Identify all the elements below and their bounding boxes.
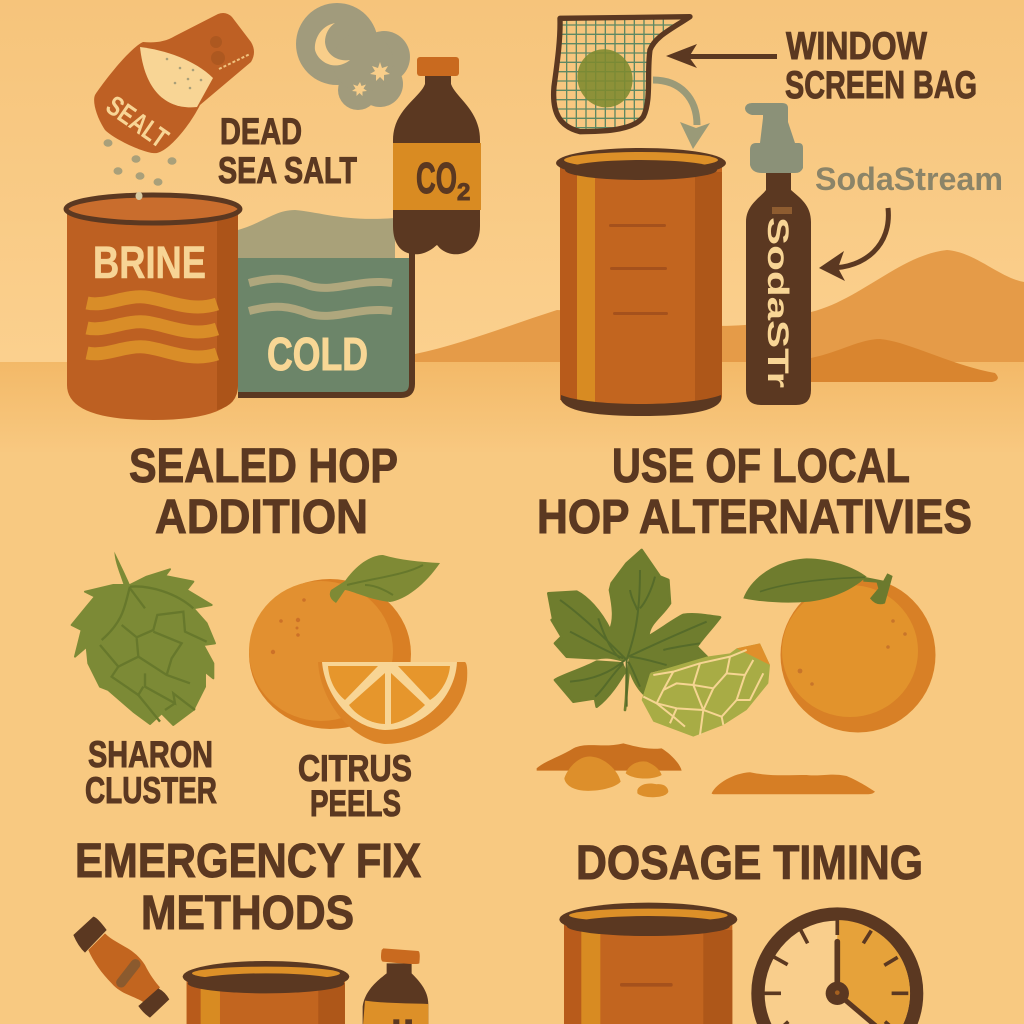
label: sharon cluster: SHARON — [88, 734, 213, 775]
title: emergency fix methods: METHODS — [141, 887, 354, 940]
panel: dosage timing illustration — [559, 903, 917, 1024]
desert hills — [415, 250, 1024, 382]
label: window screen bag — [785, 25, 977, 107]
icon: emergency can — [183, 961, 349, 1024]
brine waves — [87, 297, 217, 357]
icon: upright bottle — [363, 948, 428, 1024]
icon: moon and stars cloud — [296, 3, 410, 110]
label: cold: COLD — [267, 328, 368, 380]
label: window screen bag: WINDOW — [786, 25, 927, 68]
title: sealed hop addition — [129, 440, 398, 544]
icon: dried spice piles — [537, 743, 875, 797]
label: dead sea salt: SEA SALT — [218, 150, 357, 191]
label: CO2: CO — [416, 154, 457, 203]
water ripples — [249, 279, 392, 316]
bottle brand text: SodaSTr — [761, 217, 794, 388]
title: emergency fix methods — [75, 835, 421, 940]
icon: local hop cone section — [642, 643, 770, 737]
title: sealed hop addition: SEALED HOP — [129, 440, 398, 493]
label: dead sea salt: DEAD — [220, 111, 302, 152]
icon: dosage can — [559, 903, 737, 1024]
panel: brine can — [66, 195, 240, 420]
arrow: to sodastream — [819, 208, 888, 281]
title: sealed hop addition: ADDITION — [155, 491, 368, 544]
panel: fermenter can — [556, 148, 726, 416]
icon: CO2 bottle: 2 — [457, 179, 470, 206]
leaf — [330, 555, 440, 603]
title: emergency fix methods: EMERGENCY FIX — [75, 835, 421, 888]
arrow: bag to can — [653, 80, 710, 149]
label: sealt: SEALT — [101, 90, 174, 154]
measuring marks — [609, 224, 668, 315]
title: use of local hop alternatives — [537, 440, 972, 544]
icon: sodastream bottle — [745, 103, 811, 405]
label: dead sea salt — [218, 111, 357, 191]
icon: local orange — [743, 558, 936, 732]
icon: hop cone — [72, 552, 215, 725]
icon: window screen bag — [553, 17, 690, 133]
label: sodastream: SodaStream — [815, 161, 1003, 197]
label: brine: BRINE — [93, 237, 206, 288]
title: dosage timing: DOSAGE TIMING — [576, 837, 923, 890]
title: use of local hop alternatives: HOP ALTERNATIVIES — [537, 491, 972, 544]
label: sharon cluster — [85, 734, 217, 811]
icon: salt shaker — [94, 13, 254, 154]
label: sharon cluster: CLUSTER — [85, 770, 217, 811]
icon: local leaf — [548, 550, 720, 710]
orange slice — [318, 662, 467, 744]
panel: emergency fix illustration — [73, 917, 428, 1024]
arrow: to bag — [666, 44, 777, 68]
leaf and stem — [743, 558, 893, 604]
label: citrus peels — [298, 748, 412, 824]
icon: CO2 bottle — [393, 57, 481, 254]
icon: tilted bottle — [73, 917, 169, 1018]
icon: orange with slice — [249, 555, 467, 744]
label: citrus peels: CITRUS — [298, 748, 412, 789]
title: use of local hop alternatives: USE OF LOCAL — [612, 440, 910, 493]
panel: cold water box — [238, 210, 412, 395]
icon: clock — [758, 914, 917, 1024]
salt grains — [104, 139, 176, 200]
label: citrus peels: PEELS — [310, 783, 401, 824]
